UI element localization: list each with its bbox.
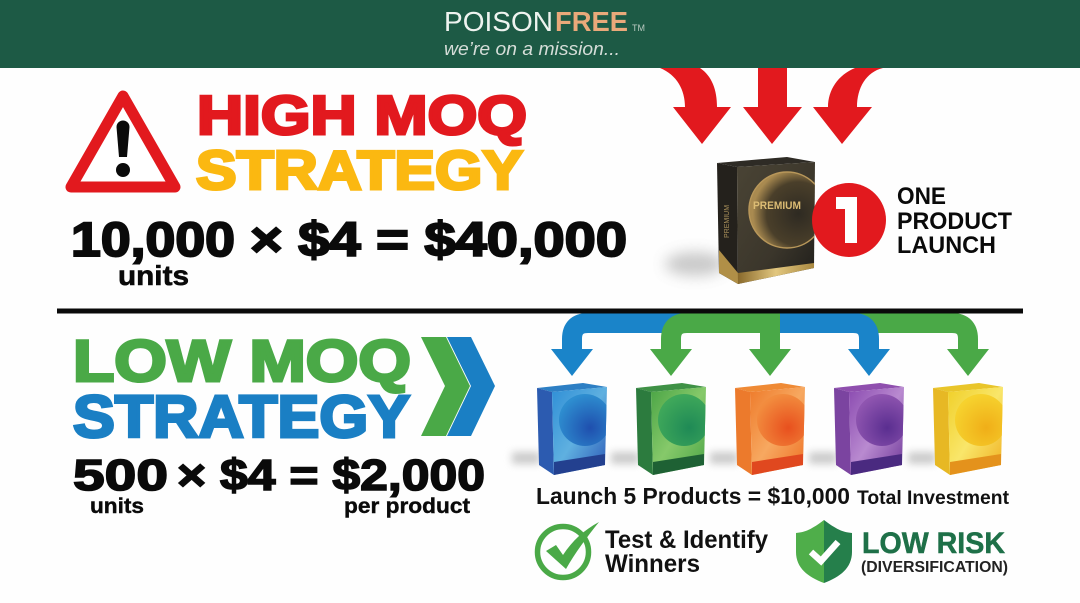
box spine label: PREMIUM xyxy=(724,205,731,238)
label: one product launch: ONE xyxy=(897,183,946,210)
text: launch 5 products total: Launch 5 Products = $10,000 xyxy=(536,483,850,509)
label: one product launch: PRODUCT xyxy=(897,208,1012,235)
brand logo accent: FREE xyxy=(555,6,628,37)
text: launch 5 products total xyxy=(536,483,1009,509)
product box: blue xyxy=(512,383,611,475)
text: test and identify winners: Test & Identify xyxy=(605,526,768,554)
tagline: we’re on a mission... xyxy=(444,38,620,59)
header band xyxy=(0,0,1080,68)
product box: green xyxy=(611,383,710,475)
badge: number one: 1 xyxy=(826,183,863,257)
label: one product launch xyxy=(897,183,1012,259)
product box: purple xyxy=(809,383,908,475)
icon: green check circle xyxy=(538,522,599,578)
equation: low moq: 500 xyxy=(73,451,168,500)
heading: strategy yellow: STRATEGY xyxy=(196,139,523,201)
text: low risk diversification: (DIVERSIFICATION) xyxy=(861,559,1008,576)
equation: low moq: × $4 = $2,000 xyxy=(177,451,485,500)
equation: high moq: units xyxy=(118,260,189,291)
trademark: TM xyxy=(632,23,645,33)
equation: high moq: × $4 = $40,000 xyxy=(250,214,627,267)
equation: high moq xyxy=(71,214,627,291)
box label: PREMIUM xyxy=(753,200,801,212)
equation: low moq: units xyxy=(90,495,144,518)
badge: number one xyxy=(812,183,886,257)
product box: premium xyxy=(665,157,825,284)
product box: orange xyxy=(710,383,809,475)
icon: warning triangle xyxy=(71,96,175,187)
heading: low moq: LOW MOQ xyxy=(73,329,411,394)
arrows: three red down arrows xyxy=(660,68,883,144)
brand logo: POISON xyxy=(444,6,553,37)
equation: high moq: 10,000 xyxy=(71,214,235,267)
icon: double chevrons xyxy=(421,337,495,436)
heading: strategy blue: STRATEGY xyxy=(73,384,410,450)
text: low risk diversification xyxy=(861,527,1008,576)
text: low risk diversification: LOW RISK xyxy=(862,527,1005,560)
divider line xyxy=(57,308,1023,314)
label: one product launch: LAUNCH xyxy=(897,232,996,259)
text: launch 5 products total: Total Investment xyxy=(857,487,1009,509)
heading: high moq: HIGH MOQ xyxy=(197,84,527,146)
text: test and identify winners: Winners xyxy=(605,550,700,578)
arrows: five branching down arrows xyxy=(551,323,989,376)
text: test and identify winners xyxy=(605,526,768,578)
equation: low moq xyxy=(73,451,485,518)
icon: green shield xyxy=(796,520,852,583)
equation: low moq: per product xyxy=(344,495,470,518)
product box: yellow xyxy=(908,383,1007,475)
